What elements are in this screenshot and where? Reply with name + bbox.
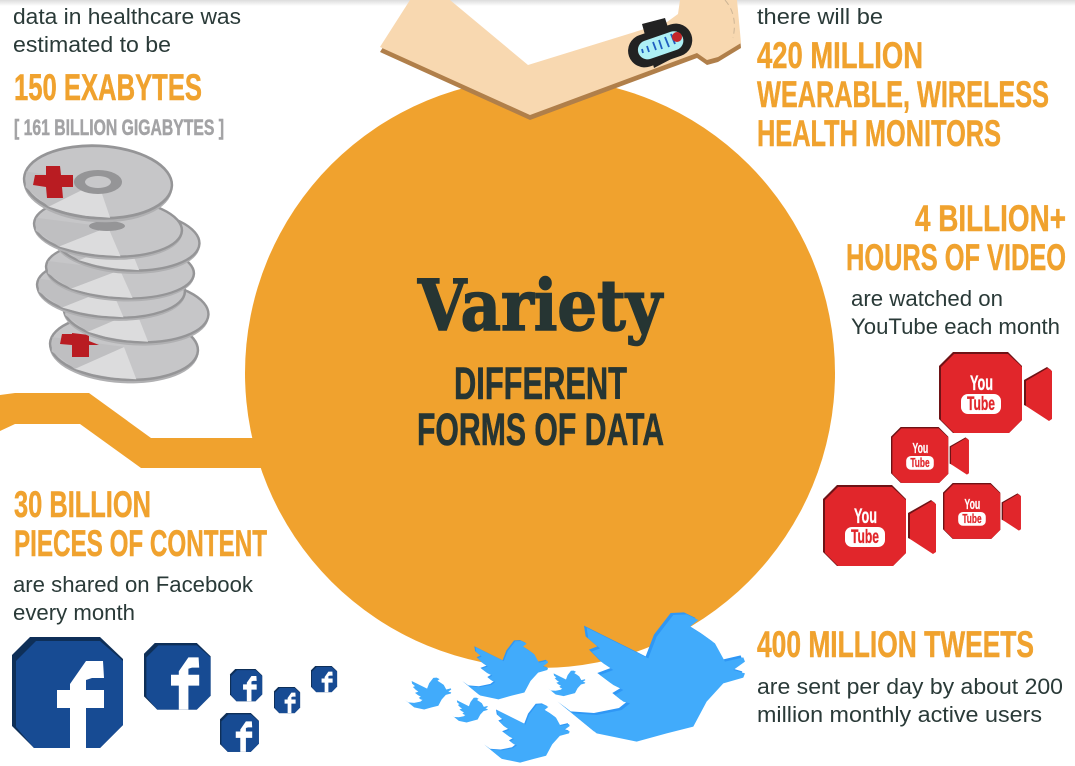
icon: YouTube camera large top: Tube — [967, 394, 995, 415]
orange connector band — [0, 393, 268, 468]
text block: Facebook content: are shared on Facebook — [13, 572, 254, 597]
icon: YouTube camera large lower — [823, 485, 936, 566]
text block: YouTube video hours — [846, 198, 1066, 339]
text block: YouTube video hours: are watched on — [851, 286, 1003, 311]
icon: YouTube camera small upper: You — [912, 441, 928, 457]
icons: Facebook logos — [12, 637, 337, 752]
text block: Facebook content: 30 BILLION — [14, 484, 151, 525]
subtitle: different forms of data: DIFFERENT — [454, 358, 627, 409]
icon: YouTube camera large top: You — [970, 372, 993, 395]
text block: healthcare data: [ 161 BILLION GIGABYTES ] — [14, 115, 224, 140]
icon: YouTube camera large lower: Tube — [851, 527, 879, 548]
icon: YouTube camera small lower — [943, 483, 1021, 539]
icon: stack of medical discs — [22, 142, 211, 387]
text block: tweets: are sent per day by about 200 — [757, 674, 1063, 699]
icon: YouTube camera large lower: You — [854, 505, 877, 528]
text block: Facebook content: every month — [13, 600, 135, 625]
text block: healthcare data: 150 EXABYTES — [14, 67, 202, 108]
icon: YouTube camera small upper — [891, 427, 969, 483]
subtitle: different forms of data — [417, 358, 664, 455]
text block: healthcare data — [13, 4, 241, 140]
icon: YouTube camera small lower: Tube — [962, 511, 982, 526]
subtitle: different forms of data: FORMS OF DATA — [417, 404, 664, 455]
text block: healthcare data: estimated to be — [13, 32, 171, 57]
central orange circle — [245, 78, 835, 668]
text block: healthcare data: data in healthcare was — [13, 4, 241, 29]
title: Variety: Variety — [417, 264, 664, 347]
text block: wearable monitors — [757, 4, 1049, 154]
icon: YouTube camera small lower: You — [964, 497, 980, 513]
text block: wearable monitors: 420 MILLION — [757, 35, 923, 76]
text block: tweets — [757, 624, 1063, 727]
icon: YouTube camera small upper: Tube — [910, 455, 930, 470]
icons: Twitter birds — [405, 612, 745, 763]
text block: tweets: million monthly active users — [757, 702, 1042, 727]
text block: wearable monitors: there will be — [757, 4, 883, 29]
text block: YouTube video hours: YouTube each month — [851, 314, 1060, 339]
icon: YouTube camera large top — [939, 352, 1052, 433]
text block: Facebook content: PIECES OF CONTENT — [14, 523, 267, 564]
icon: arm with wearable monitor — [380, 0, 741, 120]
text block: Facebook content — [13, 484, 267, 625]
